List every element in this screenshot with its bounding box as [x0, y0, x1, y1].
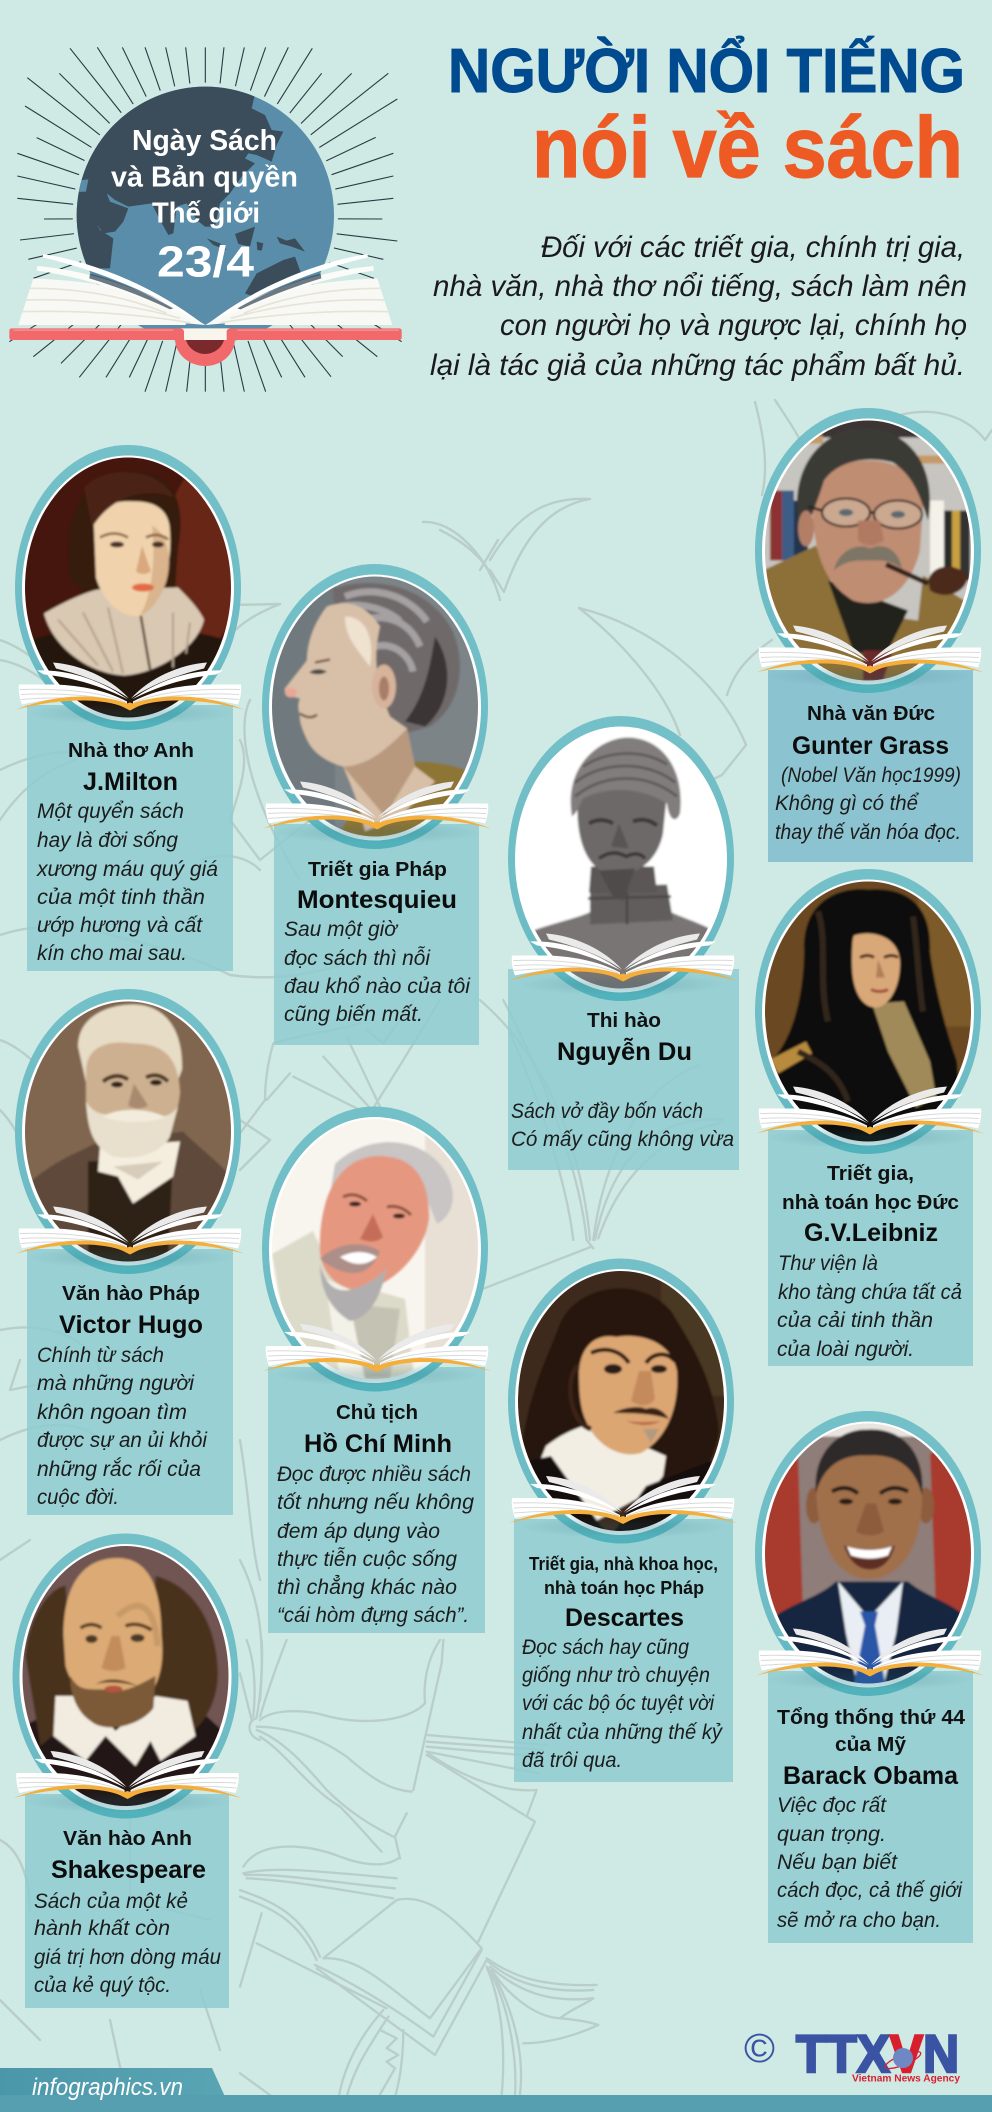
globe continents: [67, 80, 305, 297]
portrait: Leibniz: [755, 869, 984, 1154]
text: Descartes: nhà toán học Pháp: [544, 1578, 704, 1598]
footer tab: [0, 2068, 231, 2110]
text: Montesquieu: đọc sách thì nỗi: [284, 947, 431, 970]
book: Hồ Chí Minh: [263, 1324, 491, 1386]
card: Nguyễn Du: [508, 716, 739, 1170]
red book cover and spine: [9, 328, 402, 340]
emblem text: và Bản quyền: [111, 162, 298, 194]
panel: Gunter Grass: [768, 670, 973, 862]
title: [448, 36, 965, 196]
title: nói về sách: [532, 100, 963, 196]
text: Barack Obama: cách đọc, cả thế giới: [777, 1879, 963, 1902]
text: Victor Hugo: [37, 1283, 208, 1509]
text: Gunter Grass: Không gì có thể: [775, 792, 919, 815]
text: Nguyễn Du: Nguyễn Du: [557, 1036, 692, 1066]
text: Leibniz: Triết gia,: [827, 1163, 914, 1185]
text: Shakespeare: hành khất còn: [34, 1917, 170, 1940]
emblem text: 23/4: [157, 238, 255, 286]
text: Barack Obama: Tổng thống thứ 44: [777, 1707, 966, 1729]
emblem: World Book Day globe and open book: [9, 47, 402, 392]
open books between the middle columns: [240, 1000, 723, 1290]
emblem artwork: [9, 47, 402, 392]
text: Shakespeare: giá trị hơn dòng máu: [34, 1946, 221, 1969]
portrait: Barack Obama: [755, 1411, 984, 1696]
text: Descartes: đã trôi qua.: [522, 1749, 622, 1772]
text: Nguyễn Du: [511, 1010, 734, 1151]
text: Montesquieu: đau khổ nào của tôi: [284, 975, 471, 998]
website name: infographics.vn: [32, 2074, 183, 2101]
text: Barack Obama: Việc đọc rất: [777, 1794, 887, 1817]
text: Barack Obama: [777, 1707, 966, 1932]
text: Hồ Chí Minh: [277, 1402, 474, 1627]
portrait: Descartes: [508, 1258, 737, 1544]
text: Milton: hay là đời sống: [37, 829, 178, 852]
text: Hồ Chí Minh: thì chẳng khác nào: [277, 1576, 457, 1599]
emblem text: [111, 125, 298, 286]
intro paragraph: lại là tác giả của những tác phẩm bất hủ.: [430, 349, 965, 382]
text: Milton: xương máu quý giá: [36, 858, 218, 881]
agency subtitle: Vietnam News Agency: [852, 2074, 960, 2084]
text: Leibniz: nhà toán học Đức: [782, 1192, 959, 1214]
card: Descartes: [508, 1258, 737, 1782]
text: Gunter Grass: thay thế văn hóa đọc.: [775, 821, 961, 844]
sun rays around the globe: [9, 47, 402, 392]
text: Hồ Chí Minh: Hồ Chí Minh: [304, 1430, 452, 1458]
book: Victor Hugo: [16, 1206, 244, 1268]
panel: Descartes: [514, 1519, 733, 1782]
text: Nguyễn Du: Có mấy cũng không vừa: [511, 1128, 734, 1151]
panel: Montesquieu: [274, 824, 479, 1045]
panel: Leibniz: [768, 1130, 973, 1366]
footer strip: [0, 2095, 992, 2112]
text: Barack Obama: Nếu bạn biết: [777, 1851, 898, 1874]
book: Shakespeare: [14, 1751, 242, 1813]
text: Descartes: Triết gia, nhà khoa học,: [529, 1554, 718, 1574]
book: Milton: [16, 662, 244, 724]
text: Milton: Một quyển sách: [37, 800, 184, 823]
card: Gunter Grass: [755, 408, 984, 862]
text: Milton: J.Milton: [83, 768, 178, 796]
portrait: Shakespeare: [12, 1534, 242, 1818]
text: Gunter Grass: Nhà văn Đức: [807, 703, 935, 725]
book: Gunter Grass: [756, 626, 984, 688]
text: Descartes: với các bộ óc tuyệt vời: [522, 1692, 715, 1715]
text: Montesquieu: Triết gia Pháp: [308, 859, 447, 881]
text: Gunter Grass: Gunter Grass: [792, 732, 949, 760]
text: Descartes: Đọc sách hay cũng: [522, 1636, 689, 1659]
book: Nguyễn Du: [509, 934, 737, 996]
text: Leibniz: của loài người.: [777, 1338, 914, 1361]
text: Hồ Chí Minh: Đọc được nhiều sách: [277, 1463, 471, 1486]
text: Milton: ướp hương và cất: [37, 914, 203, 937]
text: Gunter Grass: (Nobel Văn học1999): [781, 764, 961, 787]
intro paragraph: nhà văn, nhà thơ nổi tiếng, sách làm nên: [433, 270, 967, 303]
portrait: Hồ Chí Minh: [262, 1106, 491, 1392]
text: Shakespeare: [34, 1828, 221, 1997]
text: Milton: của một tinh thần: [37, 886, 205, 909]
text: Barack Obama: quan trọng.: [777, 1823, 886, 1846]
text: Milton: kín cho mai sau.: [37, 942, 187, 965]
text: Leibniz: kho tàng chứa tất cả: [778, 1281, 962, 1304]
text: Victor Hugo: Victor Hugo: [59, 1311, 203, 1339]
card: Montesquieu: [262, 564, 491, 1045]
agency globe and orbit: [884, 2048, 922, 2072]
book: Leibniz: [756, 1086, 984, 1148]
text: Leibniz: G.V.Leibniz: [804, 1219, 938, 1247]
card: Victor Hugo: [15, 989, 244, 1515]
text: Barack Obama: của Mỹ: [835, 1734, 907, 1756]
text: Victor Hugo: cuộc đời.: [37, 1486, 119, 1509]
panel: Shakespeare: [25, 1794, 229, 2008]
text: Descartes: [522, 1554, 723, 1772]
text: Victor Hugo: khôn ngoan tìm: [37, 1401, 187, 1424]
text: Descartes: nhất của những thế kỷ: [522, 1721, 723, 1744]
book: Descartes: [509, 1476, 737, 1538]
portrait: Victor Hugo: [15, 989, 244, 1274]
text: Leibniz: Thư viện là: [778, 1252, 878, 1275]
text: Nguyễn Du: Thi hào: [587, 1010, 661, 1032]
copyright symbol: ©: [744, 2025, 775, 2071]
card: Hồ Chí Minh: [262, 1106, 491, 1633]
intro paragraph: con người họ và ngược lại, chính họ: [500, 309, 967, 342]
text: Montesquieu: [284, 859, 471, 1026]
panel: Hồ Chí Minh: [268, 1367, 485, 1633]
card: Leibniz: [755, 869, 984, 1366]
text: Hồ Chí Minh: thực tiễn cuộc sống: [277, 1548, 457, 1571]
panel: Victor Hugo: [27, 1249, 233, 1515]
text: Descartes: Descartes: [565, 1604, 684, 1632]
portrait: Gunter Grass: [755, 408, 984, 693]
intro paragraph: [430, 231, 967, 382]
text: Barack Obama: sẽ mở ra cho bạn.: [777, 1909, 941, 1932]
text: Hồ Chí Minh: đem áp dụng vào: [277, 1520, 440, 1543]
text: Gunter Grass: [775, 703, 961, 844]
open books at the bottom: [240, 1640, 598, 2112]
book: Montesquieu: [263, 782, 491, 844]
footer bar: [0, 2068, 992, 2112]
text: Victor Hugo: được sự an ủi khỏi: [37, 1429, 208, 1452]
text: Hồ Chí Minh: tốt nhưng nếu không: [277, 1491, 474, 1514]
panel: Nguyễn Du: [508, 969, 739, 1170]
portrait: Nguyễn Du: [508, 716, 737, 1001]
portrait: Montesquieu: [262, 564, 491, 849]
text: Montesquieu: cũng biến mất.: [284, 1003, 423, 1026]
portrait: Milton: [15, 445, 244, 730]
text: Leibniz: của cải tinh thần: [777, 1309, 933, 1332]
text: Shakespeare: Văn hào Anh: [63, 1828, 192, 1850]
text: Victor Hugo: Văn hào Pháp: [62, 1283, 200, 1305]
text: Shakespeare: của kẻ quý tộc.: [34, 1974, 171, 1997]
text: Victor Hugo: Chính từ sách: [37, 1344, 164, 1367]
text: Shakespeare: Sách của một kẻ: [34, 1890, 188, 1913]
globe: [73, 83, 338, 348]
text: Victor Hugo: mà những người: [37, 1372, 195, 1395]
logo: TTXVN: [744, 2025, 960, 2084]
text: Nguyễn Du: Sách vở đầy bốn vách: [511, 1100, 703, 1123]
text: Barack Obama: Barack Obama: [783, 1762, 959, 1790]
card: Shakespeare: [12, 1534, 242, 2008]
card: Barack Obama: [755, 1411, 984, 1943]
text: Montesquieu: Sau một giờ: [284, 918, 399, 941]
text: Milton: Nhà thơ Anh: [68, 740, 194, 762]
emblem text: Ngày Sách: [132, 125, 277, 157]
text: Descartes: giống như trò chuyện: [522, 1664, 710, 1687]
book: Barack Obama: [756, 1628, 984, 1690]
text: Hồ Chí Minh: “cái hòm đựng sách”.: [277, 1604, 469, 1627]
text: Leibniz: [777, 1163, 962, 1361]
panel: Milton: [27, 705, 233, 971]
text: Victor Hugo: những rắc rối của: [37, 1458, 201, 1481]
text: Shakespeare: Shakespeare: [51, 1856, 206, 1884]
emblem text: Thế giới: [152, 198, 260, 230]
text: Montesquieu: Montesquieu: [297, 886, 457, 914]
book pages: [18, 254, 205, 325]
agency wordmark: TTXVN: [796, 2025, 959, 2084]
intro paragraph: Đối với các triết gia, chính trị gia,: [541, 231, 965, 264]
text: Milton: [36, 740, 218, 965]
card: J.Milton: [15, 445, 244, 971]
title: NGƯỜI NỔI TIẾNG: [448, 36, 965, 106]
text: Hồ Chí Minh: Chủ tịch: [336, 1402, 418, 1424]
panel: Barack Obama: [768, 1671, 973, 1943]
